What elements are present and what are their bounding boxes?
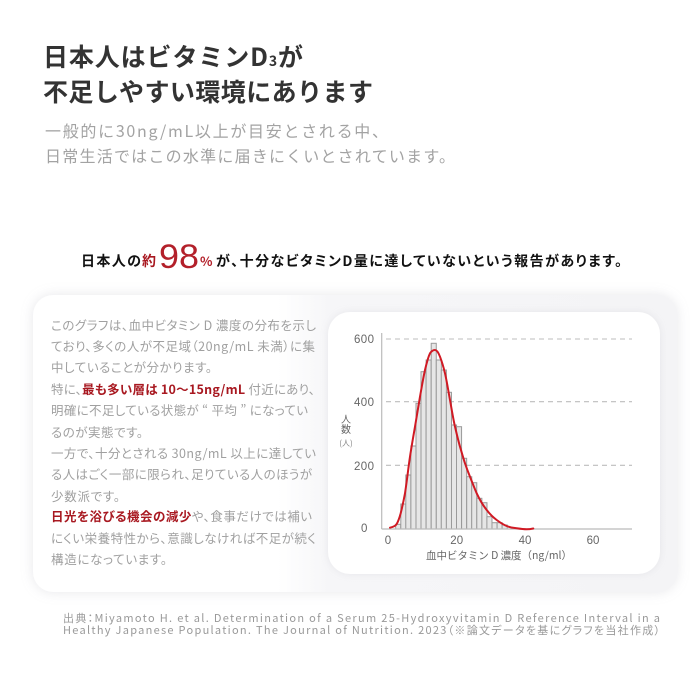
- title: 日本人はビタミンD3が: [43, 38, 303, 74]
- source note: [63, 610, 660, 638]
- lead statement: が、十分なビタミンD量に達していないという報告があります。: [216, 251, 622, 271]
- chart: vitamin D histogram: [339, 333, 632, 563]
- text block: explanation: 日光を浴びる機会の減少や、食事だけでは補い: [51, 506, 312, 525]
- source note: 出典：Miyamoto H. et al. Determination of a Serum 25-Hydroxyvitamin D Reference Interval in a: [63, 610, 660, 626]
- text block: explanation: 一方で、十分とされる 30ng/mL 以上に達してい: [51, 443, 316, 462]
- subtitle: 日常生活ではこの水準に届きにくいとされています。: [45, 143, 455, 167]
- histogram bars: [396, 343, 507, 529]
- source note: Healthy Japanese Population. The Journal of Nutrition. 2023（※論文データを基にグラフを当社作成）: [63, 622, 660, 638]
- lead statement: [81, 238, 622, 276]
- subtitle: [45, 118, 455, 167]
- text block: explanation: る人はごく一部に限られ、足りている人のほうが: [51, 464, 313, 483]
- distribution curve: [390, 350, 533, 529]
- text block: explanation: 構造になっています。: [51, 549, 167, 568]
- lead statement: 約: [142, 251, 156, 271]
- y axis labels: 200: [354, 461, 374, 473]
- x axis labels: 0: [385, 535, 391, 547]
- text block: explanation: 特に、最も多い層は 10〜15ng/mL 付近にあり、: [51, 379, 315, 398]
- title: 不足しやすい環境にあります: [43, 73, 373, 109]
- text block: explanation: にくい栄養特性から、意識しなければ不足が続く: [51, 528, 316, 547]
- x axis labels: 60: [587, 535, 599, 547]
- y axis title: 数: [341, 421, 351, 436]
- subtitle: 一般的に30ng/mL以上が目安とされる中、: [45, 118, 388, 142]
- lead statement: 日本人の: [81, 251, 141, 271]
- text block: explanation: 中していることが分かります。: [51, 357, 212, 376]
- axes: [382, 333, 632, 529]
- y axis title: 人: [341, 411, 351, 426]
- x axis labels: [385, 535, 599, 547]
- text block: explanation: [51, 315, 316, 568]
- panel: chart card: [328, 312, 660, 574]
- text block: explanation: 明確に不足している状態が “ 平均 ” になってい: [51, 400, 308, 419]
- y axis labels: 600: [354, 334, 374, 346]
- panel: explanation card: [33, 295, 677, 592]
- text block: explanation: ており、多くの人が不足域（20ng/mL 未満）に集: [51, 336, 315, 355]
- text block: explanation: るのが実態です。: [51, 422, 143, 441]
- lead statement: 98: [159, 238, 199, 276]
- x axis labels: 40: [519, 535, 531, 547]
- text block: explanation: 少数派です。: [51, 486, 120, 505]
- x axis title: 血中ビタミン D 濃度（ng/ml）: [426, 548, 572, 563]
- lead statement: %: [200, 251, 213, 270]
- y axis title: [339, 411, 353, 449]
- y axis labels: 400: [354, 397, 374, 409]
- y axis labels: 0: [361, 523, 367, 535]
- x axis labels: 20: [450, 535, 463, 547]
- title: [43, 38, 373, 109]
- y axis title: (人): [339, 438, 353, 449]
- y axis labels: [354, 334, 374, 535]
- text block: explanation: このグラフは、血中ビタミン D 濃度の分布を示し: [51, 315, 316, 334]
